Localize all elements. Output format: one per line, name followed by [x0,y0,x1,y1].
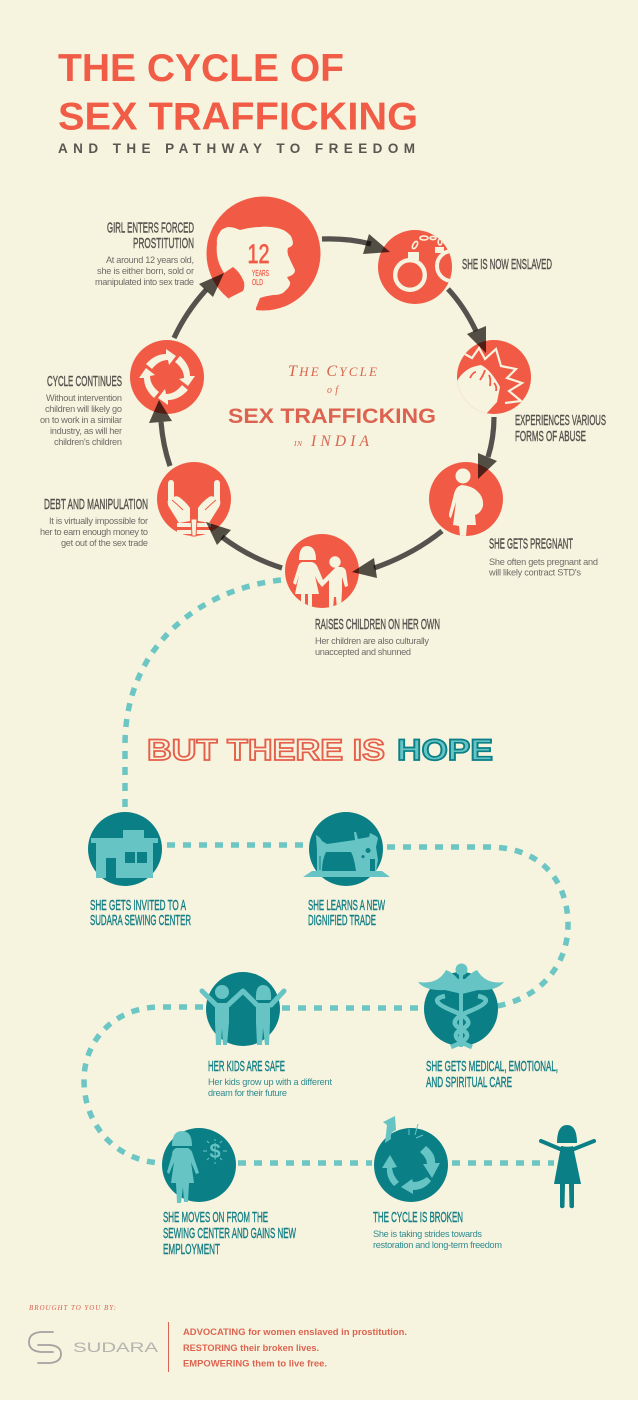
label: girl enters forced prostitution: she is either born, sold or [97,266,194,276]
label: the cycle is broken: THE CYCLE IS BROKEN [373,1210,463,1226]
title [58,47,418,156]
label: she learns a new dignified trade [308,898,385,929]
mission statement: RESTORING their broken lives. [183,1342,319,1353]
title: SEX TRAFFICKING [58,96,418,138]
label: cycle continues: Without intervention [46,393,122,403]
divider [168,1322,170,1372]
step: medical caduceus icon [418,964,504,1047]
label: she gets pregnant [488,536,598,578]
label: she gets invited: SUDARA SEWING CENTER [90,913,191,929]
label: the cycle is broken: restoration and long-term freedom [373,1240,502,1250]
title: AND THE PATHWAY TO FREEDOM [58,141,415,156]
label: her kids are safe [208,1059,332,1098]
teal dashed path from children to sewing center [125,580,281,807]
heading: but there is hope [147,734,493,767]
label: cycle continues: industry, as will her [50,426,122,436]
center heading: the cycle of sex trafficking in India: INDIA [310,433,370,450]
label: she moves on: EMPLOYMENT [163,1242,220,1258]
center heading: the cycle of sex trafficking in India: of [327,385,339,396]
step: cycle broken icon [374,1116,448,1202]
label: she moves on: SHE MOVES ON FROM THE [163,1210,268,1226]
label: raises children on her own: RAISES CHILDREN ON HER OWN [315,617,440,633]
label: she is now enslaved: SHE IS NOW ENSLAVED [462,257,552,273]
mission statement [183,1326,407,1368]
step: girl enters forced prostitution circle with head silhouette: YEARS [252,269,269,278]
brought to you by: BROUGHT TO YOU BY: [29,1304,116,1312]
label: cycle continues [40,374,122,447]
step: sewing machine icon [303,812,390,886]
label: cycle continues: CYCLE CONTINUES [47,374,122,390]
mission statement: EMPOWERING them to live free. [183,1358,327,1368]
mission statement: ADVOCATING for women enslaved in prostitution. [183,1326,407,1337]
step: kids safe icon [202,972,284,1046]
label: her kids are safe: HER KIDS ARE SAFE [208,1059,285,1075]
step: pregnant woman circle [429,462,503,536]
heading: but there is hope: HOPE [397,734,493,767]
label: girl enters forced prostitution [95,220,194,287]
label: she moves on [163,1210,296,1258]
step: woman and dollar icon: $ [209,1141,221,1163]
title: THE CYCLE OF [58,47,344,90]
label: girl enters forced prostitution: PROSTITUTION [133,236,194,252]
label: she gets pregnant: She often gets pregnant and [489,557,598,567]
center heading: the cycle of sex trafficking in India [228,363,436,450]
label: debt and manipulation: DEBT AND MANIPULATION [44,497,148,513]
label: she gets medical care: AND SPIRITUAL CARE [426,1075,512,1091]
step: sewing center store icon [88,812,162,886]
label: the cycle is broken: She is taking strides towards [373,1229,482,1239]
label: cycle continues: children will likely go [45,404,122,414]
label: she learns a new dignified trade: SHE LEARNS A NEW [308,898,385,914]
center heading: the cycle of sex trafficking in India: THE CYCLE [288,363,377,380]
label: she gets pregnant: will likely contract STD's [488,568,581,578]
cycle arrows [149,234,497,578]
label: raises children on her own: Her children are also culturally [315,636,429,646]
Sudara logo: SUDARA [73,1339,159,1355]
step: bound hands circle [157,462,231,536]
label: girl enters forced prostitution: At around 12 years old, [106,255,194,265]
label: cycle continues: on to work in a similar [40,415,122,425]
heading: but there is hope: BUT THERE IS [147,734,385,767]
label: debt and manipulation: her to earn enough money to [40,527,148,537]
step: cycle continues circle with four arrows [130,340,204,414]
label: she gets invited [90,898,191,929]
label: raises children on her own: unaccepted and shunned [315,647,411,657]
step: abuse circle with fist and burst [457,340,531,414]
center heading: the cycle of sex trafficking in India: IN [293,439,303,448]
label: debt and manipulation: get out of the sex trade [61,538,148,548]
label: raises children on her own [315,617,440,657]
label: cycle continues: children's children [54,437,122,447]
label: debt and manipulation: It is virtually impossible for [49,516,148,526]
label: the cycle is broken [373,1210,502,1250]
Sudara logo [29,1332,159,1363]
icon: free girl with raised arms [541,1125,594,1208]
label: she moves on: SEWING CENTER AND GAINS NEW [163,1226,296,1242]
step: girl enters forced prostitution circle with head silhouette [206,196,320,312]
label: girl enters forced prostitution: manipulated into sex trade [95,277,194,287]
teal dashed paths [84,845,568,1163]
label: girl enters forced prostitution: GIRL ENTERS FORCED [107,220,194,236]
label: she gets invited: SHE GETS INVITED TO A [90,898,186,914]
step: woman and dollar icon [162,1128,236,1203]
label: she gets medical care [426,1059,558,1091]
step: girl enters forced prostitution circle with head silhouette: OLD [252,278,263,287]
step: handcuffs circle [378,230,452,304]
center heading: the cycle of sex trafficking in India: SEX TRAFFICKING [228,404,436,428]
label: debt and manipulation [40,497,148,548]
step: mother and child circle [285,534,359,610]
label: experiences various forms of abuse [515,413,606,445]
step: girl enters forced prostitution circle with head silhouette: 12 [248,239,270,269]
label: her kids are safe: Her kids grow up with a different [208,1077,332,1087]
label: she learns a new dignified trade: DIGNIFIED TRADE [308,913,376,929]
label: her kids are safe: dream for their future [208,1088,287,1098]
